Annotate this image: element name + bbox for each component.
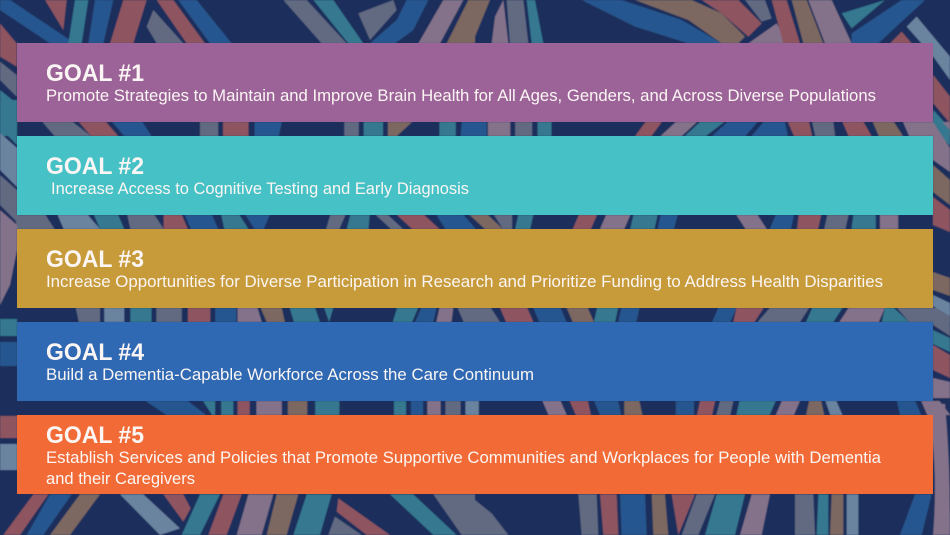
text: goal 2 description: Increase Access to Cognitive Testing and Early Diagnosis [51, 180, 469, 198]
text: goal 5 description [46, 449, 882, 488]
panel: goal 1 [17, 43, 933, 122]
panel: goal 5 [17, 415, 933, 494]
heading: goal 5: GOAL #5 [46, 422, 144, 449]
heading: goal 3: GOAL #3 [46, 246, 144, 273]
text: goal 4 description: Build a Dementia-Capable Workforce Across the Care Continuum [46, 366, 534, 384]
panel: goal 4 [17, 322, 933, 401]
gap strips [0, 122, 950, 136]
text: goal 5 description: and their Caregivers [46, 470, 195, 488]
heading: goal 1: GOAL #1 [46, 60, 144, 87]
right margin [925, 112, 950, 535]
heading: goal 4: GOAL #4 [46, 339, 145, 366]
heading: goal 2: GOAL #2 [46, 153, 144, 180]
panel: goal 2 [17, 136, 933, 215]
text: goal 3 description: Increase Opportunities for Diverse Participation in Research and Prioritize Funding to Address Health Disparities [46, 273, 883, 291]
text: goal 5 description: Establish Services and Policies that Promote Supportive Communities and Workplaces for People with Dementia [46, 449, 882, 467]
left margin [0, 100, 17, 470]
text: goal 1 description: Promote Strategies to Maintain and Improve Brain Health for All Ages, Genders, and Across Diverse Populations [46, 87, 876, 105]
panel: goal 3 [17, 229, 933, 308]
